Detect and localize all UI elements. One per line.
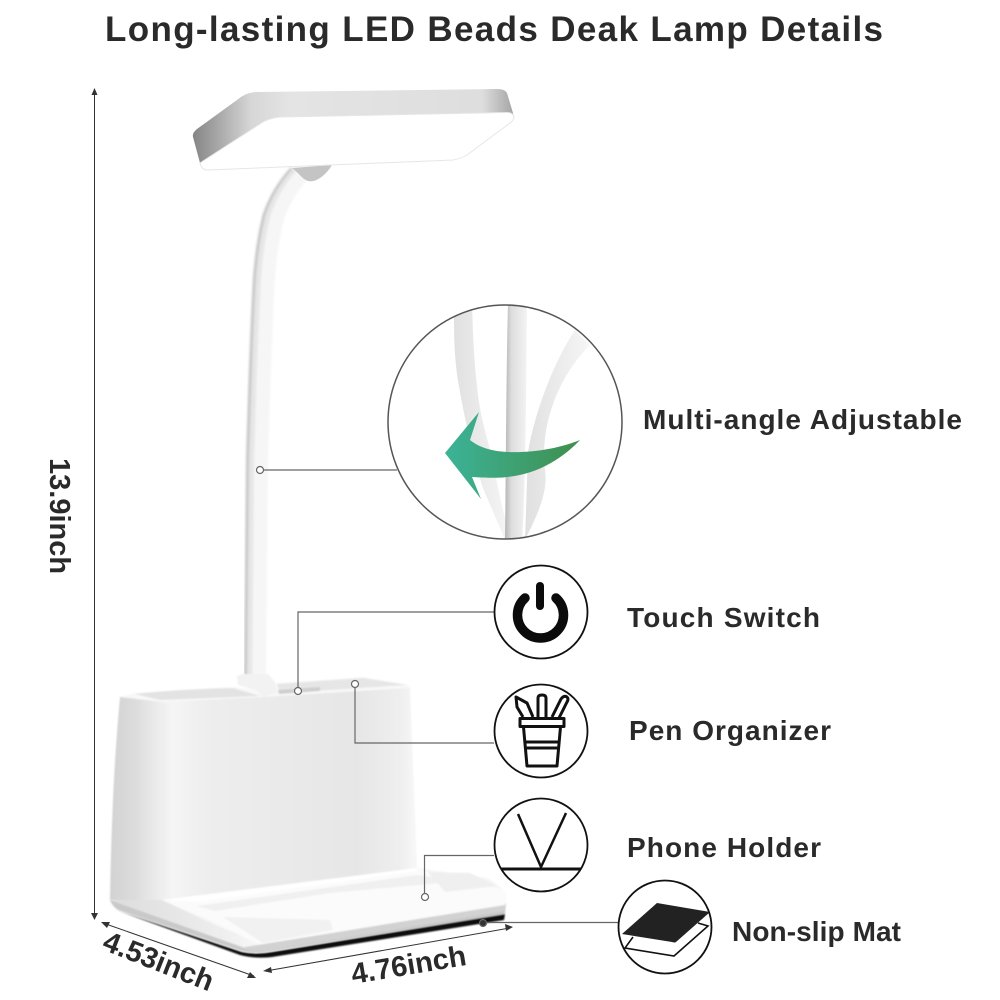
organizer tray (110, 868, 506, 958)
label: pen organizer: Pen Organizer (629, 715, 831, 746)
width label: 4.76inch (349, 940, 469, 991)
icon: non-slip mat (618, 880, 712, 974)
height dimension arrow (91, 88, 98, 920)
label: non-slip mat: Non-slip Mat (732, 916, 901, 947)
lamp illustration (110, 89, 514, 958)
lamp gooseneck (254, 174, 303, 680)
icon: green curved arrow (445, 412, 580, 499)
depth dimension arrow (101, 922, 256, 978)
icon: phone holder (494, 798, 588, 892)
icon: pen organizer (494, 684, 588, 778)
callout line: phone holder (422, 856, 494, 900)
title: Long-lasting LED Beads Deak Lamp Details (105, 10, 883, 49)
callout line: pen organizer (352, 680, 494, 743)
zoom circle: multi-angle adjustable (388, 300, 622, 540)
callout line: gooseneck (256, 466, 397, 474)
width dimension arrow (263, 924, 513, 973)
label: multi-angle adjustable: Multi-angle Adjustable (643, 404, 962, 435)
organizer body (110, 674, 420, 915)
label: phone holder: Phone Holder (627, 832, 821, 863)
depth label: 4.53inch (98, 926, 218, 998)
lamp head connector (292, 165, 332, 181)
callout line: touch switch (294, 612, 494, 694)
lamp head (193, 89, 514, 170)
label: touch switch: Touch Switch (627, 602, 820, 633)
icon: touch switch (494, 566, 588, 658)
callout line: non-slip mat (480, 920, 618, 926)
height label: 13.9inch (43, 458, 75, 574)
